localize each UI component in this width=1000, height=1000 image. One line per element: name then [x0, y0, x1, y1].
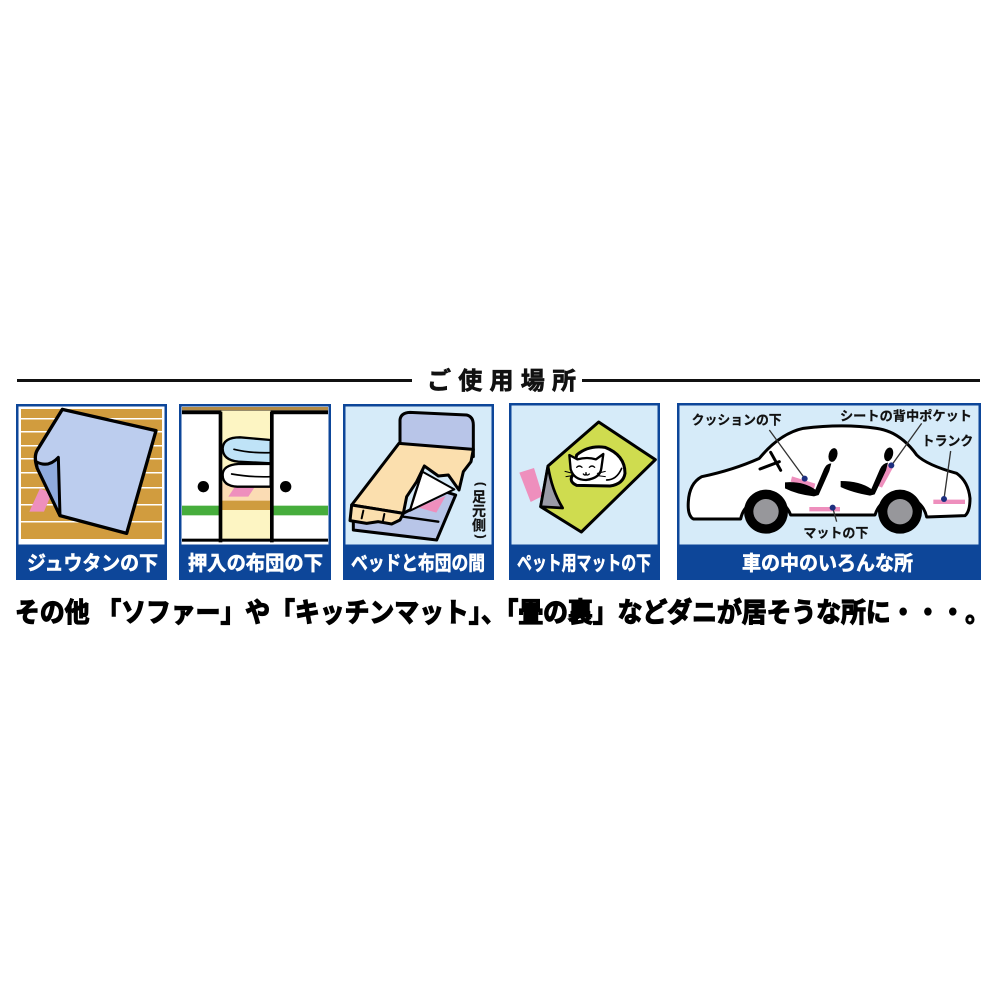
panel: under the carpet [16, 404, 167, 580]
icon: pink sheet [228, 487, 255, 497]
icon: steering wheel [760, 452, 781, 470]
icon: carpet with folded corner [35, 409, 156, 533]
icon: mat [541, 422, 655, 532]
icon: car body [688, 426, 970, 519]
label: 押入の布団の下: 押入の布団の下 [188, 552, 323, 575]
text: (足元側): 元 [472, 503, 486, 519]
icon: rear seat [841, 463, 888, 496]
icon: pink sheet under carpet [29, 488, 52, 512]
text: (足元側) [472, 482, 488, 539]
icon: left door [182, 414, 220, 540]
icon: leader lines and dots [769, 423, 951, 522]
label: ペット用マットの下: ペット用マットの下 [517, 553, 651, 575]
panel: under pet mat [509, 403, 660, 580]
icon: mattress [353, 492, 456, 540]
icon: pink sheet [519, 468, 543, 502]
text: トランク: トランク [922, 434, 973, 449]
icon: pink sheets [791, 463, 965, 511]
text: クッションの下: クッションの下 [692, 412, 782, 427]
icon: closet interior [221, 411, 271, 541]
icon: front seat [785, 463, 831, 496]
panel: between bed and futon [343, 404, 494, 580]
icon: white sheet [410, 472, 454, 511]
icon: duvet [352, 443, 473, 513]
panel: inside the car [677, 403, 981, 580]
text: (足元側): ( [474, 482, 488, 486]
text: マットの下: マットの下 [803, 525, 868, 540]
icon: pink sheet [418, 496, 446, 513]
icon: headboard [400, 412, 473, 457]
text: (足元側): 足 [472, 489, 486, 505]
icon: front wheel [744, 490, 788, 534]
label: ジュウタンの下: ジュウタンの下 [27, 552, 158, 575]
icon: folded mat corner [541, 466, 563, 508]
panel: under futon in closet [179, 404, 331, 580]
label: 車の中のいろんな所: 車の中のいろんな所 [742, 552, 913, 575]
icon: white futon [223, 464, 271, 487]
label: ベッドと布団の間: ベッドと布団の間 [351, 552, 485, 575]
text: シートの背中ポケット: シートの背中ポケット [840, 408, 972, 424]
text: (足元側): ) [474, 535, 488, 539]
icon: rear wheel [878, 490, 922, 534]
icon: right door [272, 414, 328, 540]
text: (足元側): 側 [472, 518, 486, 534]
heading: ご使用場所 with rules [17, 367, 980, 395]
icon: blue futon [223, 437, 271, 463]
icon: carpet underside fold [36, 457, 60, 516]
icon: sleeping cat [565, 447, 625, 486]
heading: ご使用場所 with rules: ご使用場所 [427, 367, 576, 395]
